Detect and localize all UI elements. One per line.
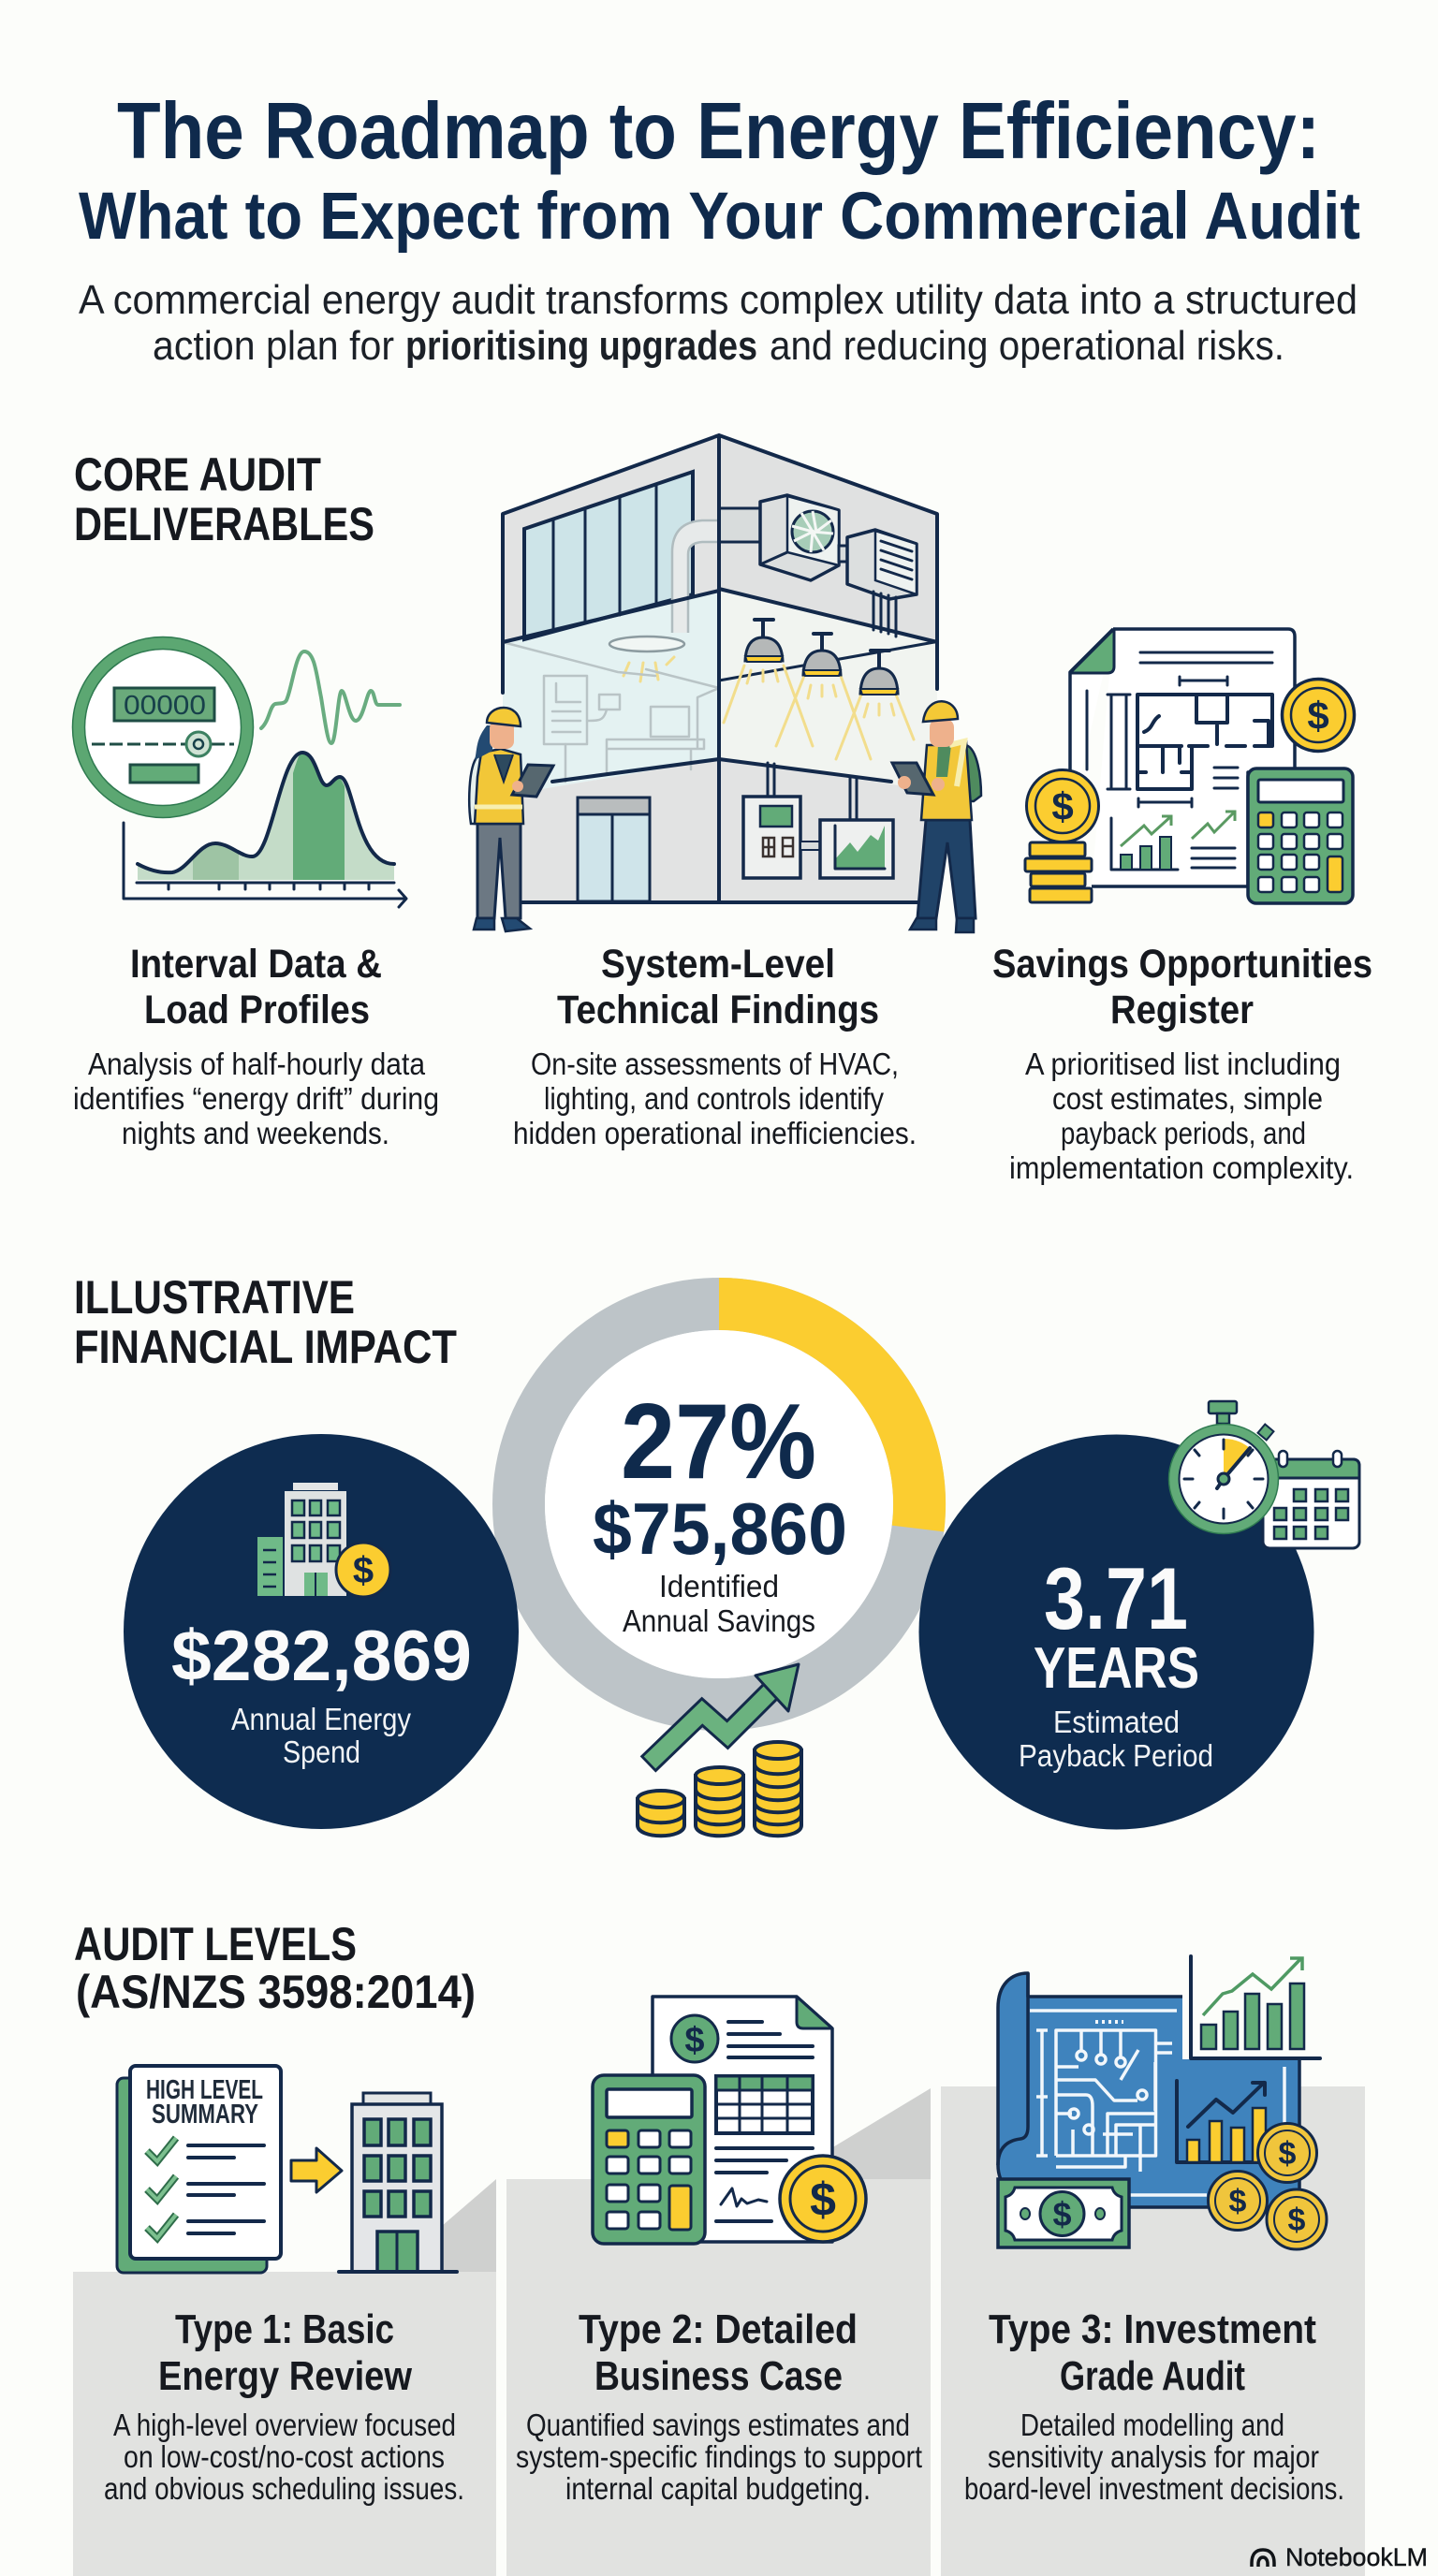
column: interval data: identifies “energy drift” during [73, 1081, 439, 1116]
text: type 3: Type 3: Investment [989, 2306, 1316, 2352]
icon: high level summary: SUMMARY [152, 2100, 258, 2130]
coin stack [1025, 769, 1099, 902]
column: savings register: payback periods, and [1061, 1116, 1306, 1150]
text: type 3: sensitivity analysis for major [988, 2439, 1319, 2474]
heading: audit levels: (AS/NZS 3598:2014) [76, 1966, 476, 2018]
column: savings register: Savings Opportunities [992, 942, 1372, 987]
HVAC unit [760, 495, 917, 637]
duct and ceiling vent [609, 508, 771, 681]
icon: banknote: $ [1052, 2195, 1072, 2233]
text: type 2: Type 2: Detailed [579, 2306, 858, 2352]
donut chart: 27% savings: $75,860 [593, 1487, 847, 1570]
stat circle: annual energy spend: Spend [283, 1734, 360, 1769]
icon: office building with coin [257, 1483, 390, 1597]
control panels [743, 763, 893, 878]
icon: banknote [998, 2179, 1129, 2247]
heading: core audit deliverables [74, 448, 374, 550]
worker left [469, 708, 553, 931]
coin top right [1283, 680, 1354, 751]
text: type 1 [104, 2306, 464, 2506]
column: savings register: implementation complexity. [1009, 1150, 1354, 1185]
title: The Roadmap to Energy Efficiency: [117, 87, 1320, 176]
circuit diagram [1036, 2030, 1172, 2172]
mini bar chart [1111, 818, 1178, 870]
text: type 1: Energy Review [158, 2353, 413, 2399]
icon: large coin [780, 2156, 866, 2242]
icon: business case document: $ [684, 2021, 705, 2060]
stat circle: payback period: YEARS [1034, 1636, 1199, 1701]
text: type 3: Detailed modelling and [1020, 2408, 1284, 2442]
subtitle: A commercial energy audit transforms complex utility data into a structured [79, 277, 1357, 323]
heading: audit levels: AUDIT LEVELS [74, 1918, 357, 1970]
column: technical findings [513, 942, 917, 1150]
column: savings register [992, 942, 1372, 1185]
heading: illustrative financial impact [74, 1271, 457, 1373]
donut chart: 27% savings: 27% [621, 1383, 816, 1501]
icon: savings register document [1025, 629, 1354, 903]
donut chart: 27% savings: Identified [659, 1569, 779, 1603]
heading: illustrative financial impact: ILLUSTRATIVE [74, 1271, 355, 1324]
meter dial: 00000 [124, 691, 206, 721]
donut chart: 27% savings: Annual Savings [623, 1603, 815, 1638]
column: interval data: Interval Data & [130, 942, 382, 987]
panel: type 3 investment grade audit [941, 1952, 1365, 2576]
icon: calculator [593, 2075, 705, 2244]
icon: business case document [653, 1997, 832, 2242]
watermark: NotebookLM: NotebookLM [1285, 2543, 1428, 2571]
text: type 3: board-level investment decisions. [964, 2471, 1344, 2506]
floor plan [1137, 695, 1272, 789]
panel: type 1 basic energy review [73, 2066, 496, 2576]
icon: large coin: $ [810, 2174, 836, 2226]
icon: high level summary: HIGH LEVEL [146, 2075, 263, 2105]
building frame [503, 435, 937, 902]
title: What to Expect from Your Commercial Audit [79, 180, 1360, 254]
calendar [1263, 1451, 1359, 1548]
icon: office building [339, 2093, 457, 2272]
column: savings register: A prioritised list including [1025, 1046, 1341, 1081]
heading: illustrative financial impact: FINANCIAL IMPACT [74, 1321, 457, 1373]
stat circle: payback period: Estimated [1053, 1705, 1180, 1739]
subtitle [79, 277, 1357, 369]
icon: coins: $ [1229, 2184, 1247, 2219]
text: type 2: system-specific findings to support [516, 2439, 922, 2474]
white growth chart [1182, 1952, 1323, 2059]
text: type 2: internal capital budgeting. [565, 2471, 871, 2506]
text: type 1: and obvious scheduling issues. [104, 2471, 464, 2506]
title [79, 87, 1360, 254]
stat circle: payback period: Payback Period [1019, 1738, 1213, 1773]
stat circle: payback period: 3.71 [1044, 1549, 1188, 1647]
column: savings register: cost estimates, simple [1052, 1081, 1323, 1116]
icon: coin stacks [638, 1742, 801, 1836]
panel: type 2 detailed business case [506, 1997, 931, 2576]
text: type 2: Business Case [594, 2353, 843, 2399]
document [1070, 629, 1295, 886]
column: interval data [73, 942, 439, 1150]
column: savings register: Register [1110, 988, 1254, 1032]
door [578, 798, 650, 901]
windows [524, 472, 693, 639]
column: interval data: Analysis of half-hourly data [88, 1046, 426, 1081]
coin top right: $ [1307, 694, 1329, 738]
heading: core audit deliverables: CORE AUDIT [74, 448, 321, 501]
text: type 1: A high-level overview focused [113, 2408, 456, 2442]
pendant lights [719, 620, 934, 759]
icon: yellow arrow [291, 2148, 342, 2192]
icon: coins: $ [1279, 2136, 1297, 2172]
building walls [503, 435, 937, 902]
stat circle: annual energy spend: $282,869 [171, 1617, 472, 1696]
column: technical findings: hidden operational inefficiencies. [513, 1116, 917, 1150]
stat circle: payback period [919, 1434, 1314, 1829]
calculator [1248, 768, 1353, 903]
text: type 3 [964, 2306, 1344, 2506]
heading: core audit deliverables: DELIVERABLES [74, 498, 374, 550]
icon: high level summary [117, 2066, 281, 2273]
text: type 1: on low-cost/no-cost actions [124, 2439, 445, 2474]
icon: savings register document: $ [1051, 784, 1074, 828]
illustration: building cross-section [503, 435, 937, 902]
icon: office building with coin: $ [353, 1550, 374, 1591]
subtitle: prioritising upgrades [405, 323, 757, 369]
heading: audit levels [74, 1918, 476, 2018]
worker right [892, 701, 981, 932]
donut chart: 27% savings [519, 1304, 919, 1705]
stat circle: annual energy spend: Annual Energy [231, 1702, 411, 1736]
load profile chart [124, 753, 406, 907]
column: technical findings: On-site assessments of HVAC, [531, 1046, 899, 1081]
yellow bar chart [1177, 2081, 1259, 2162]
column: technical findings: Technical Findings [557, 988, 879, 1032]
column: interval data: nights and weekends. [122, 1116, 389, 1150]
column: technical findings: System-Level [601, 942, 835, 987]
subtitle: and reducing operational risks. [770, 323, 1284, 369]
column: technical findings: lighting, and controls identify [544, 1081, 884, 1116]
text: type 1: Type 1: Basic [175, 2306, 394, 2352]
icon: blueprint with charts [998, 1952, 1323, 2207]
icon: coins [1208, 2123, 1327, 2249]
stat circle: annual energy spend [124, 1434, 519, 1829]
icon: growth arrow [648, 1664, 799, 1764]
icon: coins: $ [1288, 2203, 1306, 2238]
text: type 3: Grade Audit [1060, 2353, 1245, 2399]
stopwatch [1168, 1401, 1279, 1533]
text: type 2: Quantified savings estimates and [526, 2408, 910, 2442]
subtitle: action plan for [153, 323, 394, 369]
column: interval data: Load Profiles [144, 988, 370, 1032]
icon: meter and load profile [73, 637, 406, 907]
interior equipment sketch [503, 642, 719, 782]
icon: stopwatch and calendar [1168, 1401, 1359, 1548]
text: type 2 [516, 2306, 922, 2506]
signal wave [261, 651, 400, 743]
meter dial [73, 637, 253, 818]
